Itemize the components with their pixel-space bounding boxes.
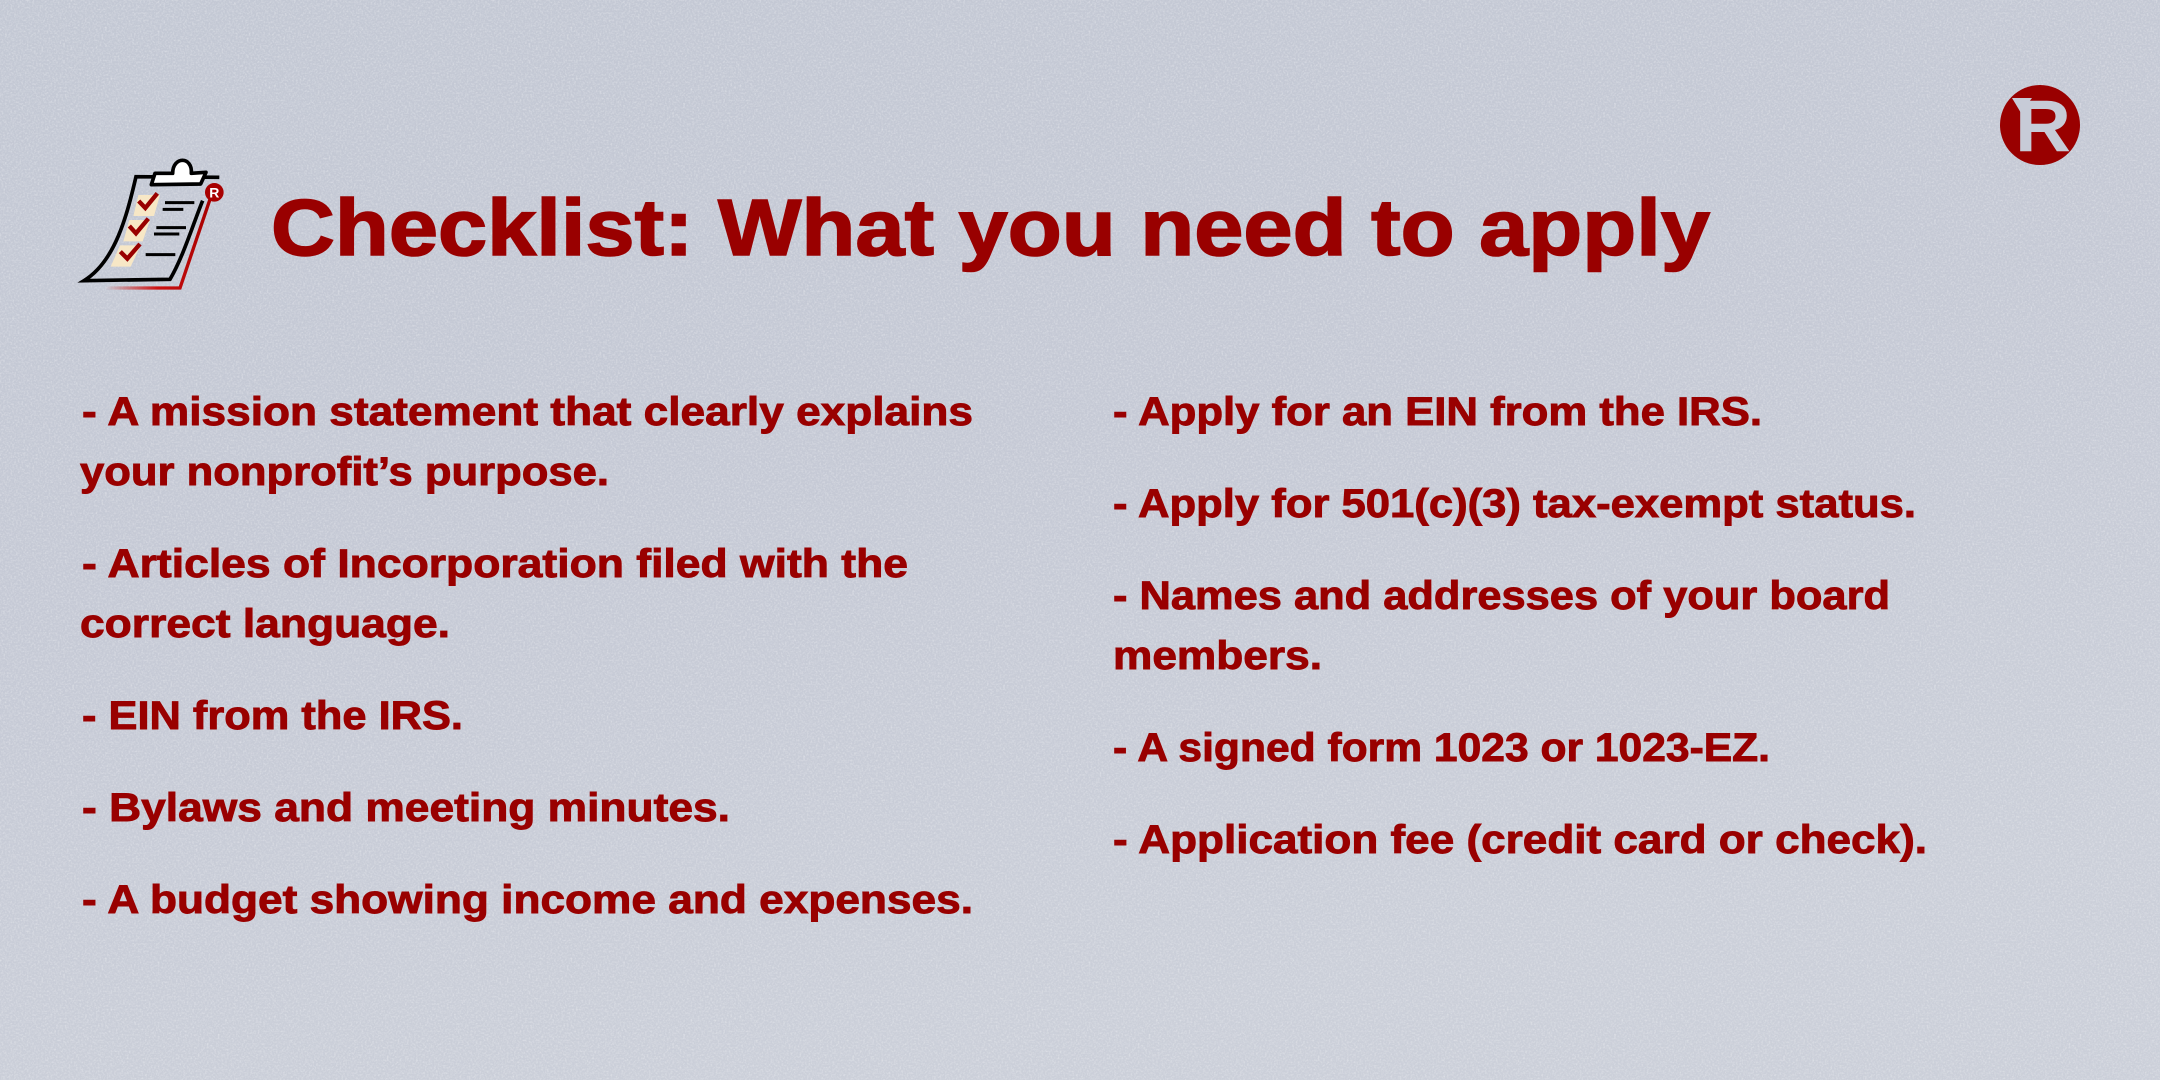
item: articles of incorporation: - Articles of Incorporation filed with the: [82, 542, 908, 586]
item: apply for 501(c)(3): - Apply for 501(c)(3) tax-exempt status.: [1113, 482, 1916, 526]
item: mission statement: - A mission statement that clearly explains: [82, 390, 973, 434]
item: board members line 2: members.: [1113, 634, 1322, 678]
logo: R badge: R: [2015, 86, 2071, 167]
item: bylaws: - Bylaws and meeting minutes.: [82, 786, 730, 830]
right checklist column: [1113, 390, 1927, 862]
icon: clipboard checklist: [84, 160, 224, 288]
item: mission statement line 2: your nonprofit’s purpose.: [80, 450, 609, 494]
item: apply for EIN: - Apply for an EIN from the IRS.: [1113, 390, 1762, 434]
title: Checklist: What you need to apply: [271, 183, 1711, 272]
item: application fee: - Application fee (credit card or check).: [1113, 818, 1927, 862]
item: signed form: - A signed form 1023 or 1023-EZ.: [1113, 726, 1770, 770]
logo: R badge: [2000, 85, 2080, 167]
item: EIN: - EIN from the IRS.: [82, 694, 463, 738]
item: board members: - Names and addresses of your board: [1113, 574, 1890, 618]
left checklist column: [80, 390, 973, 922]
item: budget: - A budget showing income and expenses.: [82, 878, 973, 922]
item: articles of incorporation line 2: correct language.: [80, 602, 450, 646]
icon: clipboard checklist: R: [209, 184, 219, 200]
